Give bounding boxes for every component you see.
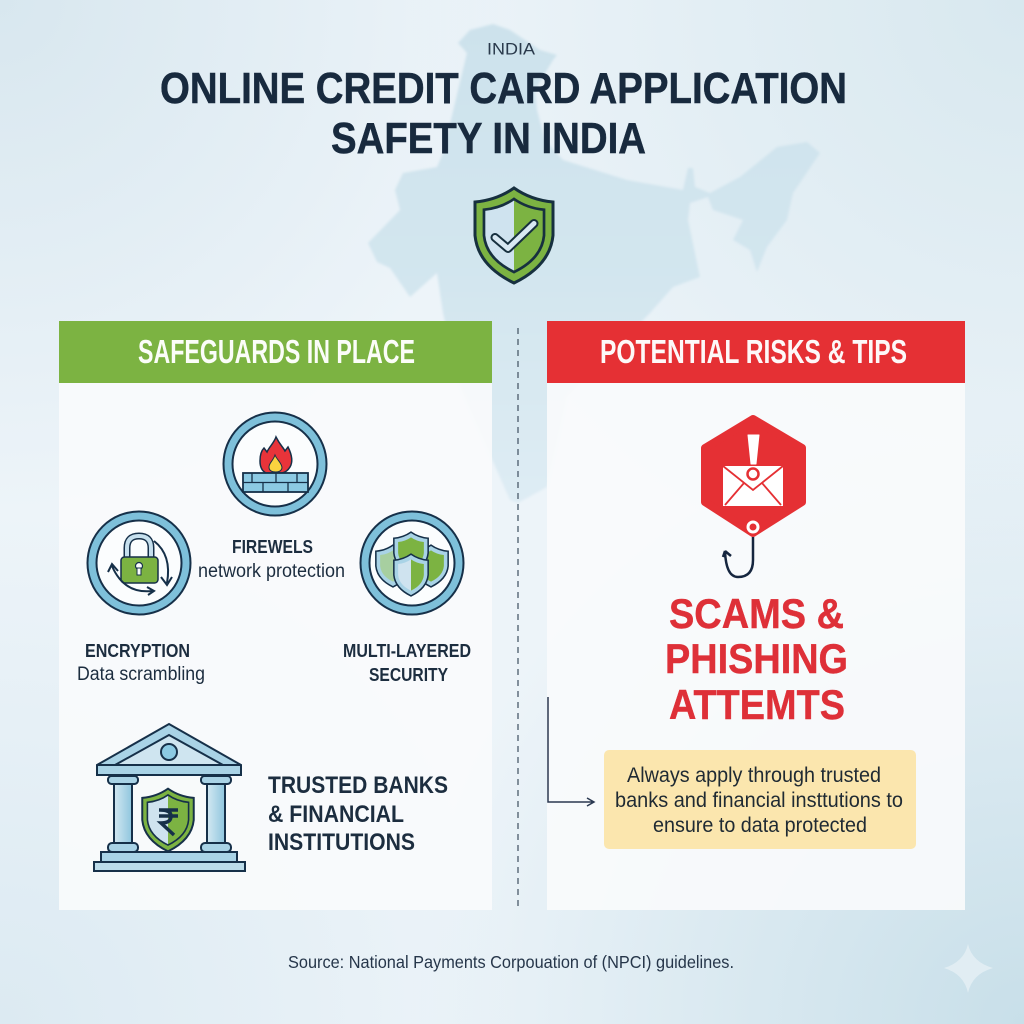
panel: safeguards in place (59, 321, 492, 910)
icon: main security shield with check (475, 188, 553, 283)
heading: scams and phishing attempts: PHISHING (665, 635, 848, 682)
title: ONLINE CREDIT CARD APPLICATION (160, 64, 847, 113)
panel heading: risks: POTENTIAL RISKS & TIPS (600, 333, 907, 370)
icon: phishing envelope on hook (705, 419, 802, 577)
icon: encryption padlock (88, 512, 190, 614)
panel: potential risks and tips (547, 321, 965, 910)
title: SAFETY IN INDIA (331, 114, 646, 163)
callout: safety tip: ensure to data protected (653, 814, 867, 837)
label: firewalls (198, 536, 345, 582)
icon: bank building (94, 724, 245, 871)
label: multi-layered security (343, 640, 471, 685)
heading: scams and phishing attempts: ATTEMTS (669, 681, 845, 728)
panel heading: safeguards: SAFEGUARDS IN PLACE (138, 333, 415, 370)
label: encryption: ENCRYPTION (85, 640, 190, 661)
label: multi-layered security: MULTI-LAYERED (343, 640, 471, 661)
label: trusted banks: INSTITUTIONS (268, 829, 415, 856)
label: firewalls: network protection (198, 561, 345, 582)
panel heading: safeguards (59, 321, 492, 383)
icon: firewall (224, 412, 326, 516)
label: trusted banks (268, 772, 448, 856)
source note: Source: National Payments Corpouation of (NPCI) guidelines. (288, 952, 734, 972)
heading: scams and phishing attempts (665, 590, 848, 728)
callout: safety tip (604, 750, 916, 849)
arrow to tip (548, 697, 594, 806)
background map of India (368, 24, 820, 503)
label: multi-layered security: SECURITY (369, 664, 449, 685)
heading: scams and phishing attempts: SCAMS & (669, 590, 844, 637)
dashed divider (517, 328, 519, 910)
icon: layered shields (360, 512, 464, 614)
callout: safety tip: banks and financial insttutions to (615, 789, 903, 812)
icon: sparkle (944, 944, 993, 993)
label: trusted banks: TRUSTED BANKS (268, 772, 448, 799)
label: encryption (77, 640, 205, 685)
label: firewalls: FIREWELS (232, 536, 313, 557)
panel heading: risks (547, 321, 965, 383)
small heading: India: INDIA (487, 40, 536, 58)
title (160, 64, 847, 163)
label: trusted banks: & FINANCIAL (268, 801, 404, 828)
label: encryption: Data scrambling (77, 664, 205, 685)
callout: safety tip: Always apply through trusted (627, 764, 881, 787)
